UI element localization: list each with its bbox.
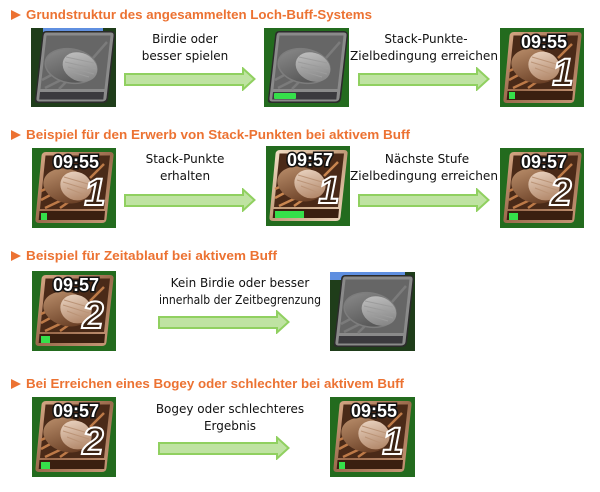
arrow bbox=[359, 190, 488, 210]
icon: inactive buff, no points bbox=[31, 28, 116, 107]
icon: active buff level 1 at 09:55: 1 bbox=[382, 421, 404, 463]
label: Bogey oder schlechteres Ergebnis bbox=[156, 402, 304, 433]
label: Kein Birdie oder besser bbox=[159, 276, 321, 307]
heading: Beispiel Zeitablauf: Beispiel für Zeitablauf bei aktivem Buff bbox=[26, 248, 278, 263]
label: Stack-Punkte erhalten: Stack-Punkte bbox=[146, 152, 224, 166]
heading: Bogey: Bei Erreichen eines Bogey oder schlechter bei aktivem Buff bbox=[26, 376, 405, 391]
icon: active buff level 2 at 09:57: 2 bbox=[549, 172, 572, 214]
label: Kein Birdie oder besser: innerhalb der Zeitbegrenzung bbox=[159, 293, 321, 307]
label: Nächste Stufe Zielbedingung erreichen: Nächste Stufe bbox=[385, 152, 469, 166]
label: Stack-Punkte-Zielbedingung erreichen: Zielbedingung erreichen bbox=[350, 49, 498, 63]
label: Bogey oder schlechteres Ergebnis: Bogey oder schlechteres bbox=[156, 402, 304, 416]
icon: active buff level 1 at 09:55: 09:55 bbox=[53, 152, 99, 172]
arrow bbox=[159, 312, 288, 332]
icon: buff expired, grey bbox=[330, 272, 415, 351]
label: Birdie oder besser spielen bbox=[142, 32, 228, 63]
label: Stack-Punkte erhalten: erhalten bbox=[160, 169, 210, 183]
label: Nächste Stufe Zielbedingung erreichen: Zielbedingung erreichen bbox=[350, 169, 498, 183]
heading: Grundstruktur: Grundstruktur des angesammelten Loch-Buff-Systems bbox=[26, 7, 372, 22]
icon: active buff level 1 at 09:55: 1 bbox=[552, 52, 574, 94]
icon: active buff level 2 at 09:57 bbox=[32, 397, 116, 477]
arrow bbox=[159, 438, 288, 458]
icon: active buff level 2 at 09:57: 2 bbox=[81, 421, 104, 463]
label: Bogey oder schlechteres Ergebnis: Ergebnis bbox=[204, 419, 256, 433]
label: Nächste Stufe Zielbedingung erreichen bbox=[350, 152, 498, 183]
label: Stack-Punkte-Zielbedingung erreichen bbox=[350, 32, 498, 63]
arrow bbox=[125, 190, 254, 210]
icon: active buff level 2 at 09:57: 09:57 bbox=[53, 275, 99, 295]
arrow bbox=[125, 68, 254, 90]
icon: active buff level 1 at 09:57, more points bbox=[266, 146, 350, 226]
icon: active buff level 2 at 09:57: 09:57 bbox=[521, 152, 567, 172]
icon: active buff level 2 at 09:57: 09:57 bbox=[53, 401, 99, 421]
label: Birdie oder besser spielen: besser spielen bbox=[142, 49, 228, 63]
label: Birdie oder besser spielen: Birdie oder bbox=[152, 32, 218, 46]
label: Kein Birdie oder besser: Kein Birdie oder besser bbox=[171, 276, 309, 290]
icon: active buff level 2 at 09:57 bbox=[32, 271, 116, 351]
icon: active buff level 1 at 09:57, more points: 1 bbox=[318, 170, 340, 212]
icon: inactive buff, partial points bbox=[264, 28, 349, 107]
icon: active buff level 1 at 09:55 bbox=[330, 397, 415, 477]
icon: active buff level 1 at 09:57, more points: 09:57 bbox=[287, 150, 333, 170]
icon: active buff level 1 at 09:55 bbox=[32, 148, 116, 228]
icon: active buff level 1 at 09:55: 09:55 bbox=[351, 401, 397, 421]
icon: active buff level 2 at 09:57: 2 bbox=[81, 295, 104, 337]
arrow bbox=[359, 68, 488, 90]
icon: active buff level 1 at 09:55: 09:55 bbox=[521, 32, 567, 52]
icon: active buff level 1 at 09:55 bbox=[500, 28, 584, 107]
icon: active buff level 1 at 09:55: 1 bbox=[84, 172, 106, 214]
icon: active buff level 2 at 09:57 bbox=[500, 148, 584, 228]
label: Stack-Punkte erhalten bbox=[146, 152, 224, 183]
heading: Beispiel Stack-Punkte: Beispiel für den Erwerb von Stack-Punkten bei aktivem Buff bbox=[26, 127, 411, 142]
label: Stack-Punkte-Zielbedingung erreichen: Stack-Punkte- bbox=[384, 32, 468, 46]
